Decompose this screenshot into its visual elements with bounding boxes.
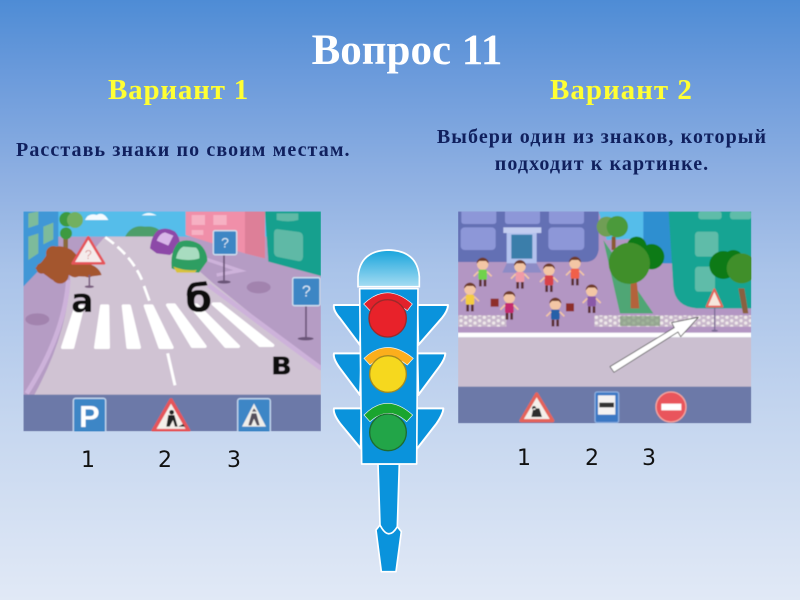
road markings [105, 237, 143, 283]
school building [458, 211, 599, 262]
label digits: variant 2: 2 [585, 446, 599, 471]
satchels [491, 299, 499, 307]
label digits: variant 1: 1 [81, 448, 95, 473]
panel: variant 1 road picture: в [270, 343, 292, 382]
sign: children [521, 394, 553, 421]
text: task 2: Выбери один из знаков, который [437, 126, 767, 148]
body [360, 289, 418, 464]
sign bar [23, 395, 321, 431]
dome [358, 250, 419, 287]
panel: variant 1 road picture: ? [85, 248, 92, 262]
letters: а [71, 281, 94, 320]
panel: variant 1 road picture [23, 211, 321, 434]
trees [612, 237, 616, 250]
panel: variant 1 road picture: P [79, 400, 100, 434]
buildings [23, 211, 58, 287]
pavement and road [23, 237, 321, 397]
sign bar [458, 387, 751, 423]
label digits: variant 1: 3 [227, 448, 241, 473]
cars [150, 229, 207, 273]
side visors [334, 305, 448, 450]
sign: no entry [656, 392, 686, 422]
arrow [610, 317, 698, 372]
panel: variant 1 road picture: ? [221, 235, 229, 251]
text: task 1: Расставь знаки по своим местам. [16, 139, 351, 161]
leaf pile [35, 246, 102, 284]
sign: pedestrian crossing [238, 399, 270, 434]
sign: bus stop [595, 392, 619, 423]
heading: variant 2: Вариант 2 [550, 74, 693, 106]
sign: road works [153, 400, 189, 431]
children [474, 258, 492, 286]
pavement [458, 211, 751, 335]
tree [62, 238, 68, 249]
road [458, 333, 751, 337]
question signs [224, 253, 306, 338]
traffic light [334, 250, 448, 572]
text: task 2: подходит к картинке. [495, 153, 709, 175]
label digits: variant 1: 2 [158, 448, 172, 473]
flower hedge [458, 315, 506, 327]
sky [58, 212, 268, 238]
panel: variant 2 school picture [458, 211, 757, 423]
label digits: variant 2 [517, 446, 656, 471]
title: Вопрос 11 [312, 27, 502, 74]
panel: variant 1 road picture: ? [302, 284, 311, 301]
sign: parking [73, 398, 106, 433]
background right [599, 211, 673, 313]
text: task 2 [437, 126, 767, 175]
heading: variant 1: Вариант 1 [108, 74, 249, 106]
red lamp [364, 293, 412, 337]
zebra crossing [63, 304, 273, 347]
label digits: variant 1 [81, 448, 241, 473]
small sign [714, 307, 716, 330]
pole [376, 464, 401, 572]
label digits: variant 2: 1 [517, 446, 531, 471]
label digits: variant 2: 3 [642, 446, 656, 471]
yellow lamp [364, 347, 413, 392]
green lamp [364, 403, 413, 451]
panel: variant 1 road picture: б [185, 276, 212, 321]
sign a [88, 274, 91, 286]
